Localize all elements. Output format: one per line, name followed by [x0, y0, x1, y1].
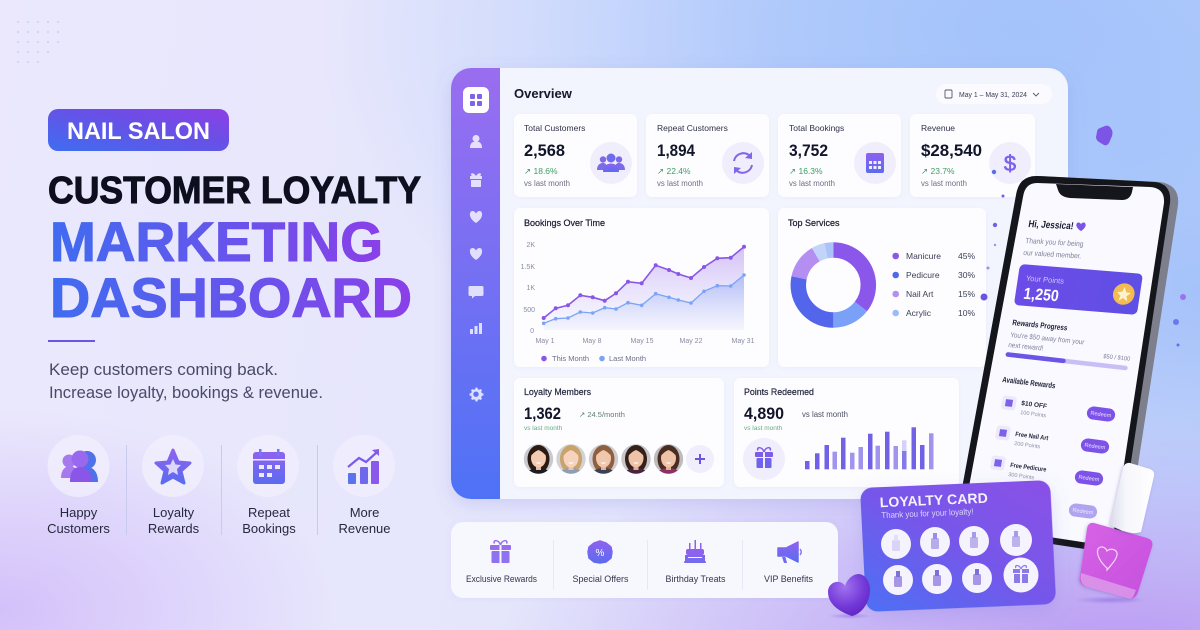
- benefit: birthday treats: Birthday Treats: [666, 574, 726, 585]
- stat card: revenue: ↗ 23.7%: [921, 166, 955, 176]
- reward: 10 off: [1001, 395, 1116, 422]
- donut legend: Manicure: [906, 251, 941, 261]
- benefit: loyalty rewards: Rewards: [148, 521, 200, 536]
- benefit: special offers: Special Offers: [572, 574, 629, 585]
- card subtitle: Thank you for your loyalty!: [881, 506, 974, 520]
- donut legend: Pedicure: [906, 270, 940, 280]
- stat card: repeat customers: ↗ 22.4%: [657, 166, 691, 176]
- benefit: exclusive rewards: Exclusive Rewards: [466, 574, 537, 585]
- donut legend: 15%: [958, 289, 975, 299]
- benefit: more revenue: More: [350, 505, 379, 520]
- bottom benefits strip: [451, 522, 838, 598]
- polish cap: [1110, 463, 1154, 533]
- donut legend: Acrylic: [906, 308, 932, 318]
- y axis labels: 1K: [526, 285, 535, 292]
- member avatar 2: [556, 444, 586, 474]
- stat card: total bookings: ↗ 16.3%: [789, 166, 823, 176]
- area: this month: [544, 247, 744, 330]
- y axis labels: 0: [530, 328, 534, 335]
- x axis labels: May 8: [582, 338, 602, 345]
- chart card: top services: [778, 208, 986, 367]
- title: MARKETING: [50, 210, 383, 273]
- stat card: repeat customers: vs last month: [657, 179, 703, 188]
- badge: nail salon: [48, 109, 229, 151]
- sidebar: [451, 68, 500, 499]
- decorative dot grid: [17, 21, 59, 63]
- stat card: repeat customers: Repeat Customers: [657, 123, 728, 133]
- card stamps: [881, 524, 1038, 595]
- benefit: more revenue: Revenue: [338, 521, 391, 536]
- benefit: repeat bookings: Repeat: [248, 505, 290, 520]
- benefit: loyalty rewards: Loyalty: [153, 505, 195, 520]
- stat card: total customers: vs last month: [524, 179, 570, 188]
- stat card: total bookings: 3,752: [789, 141, 828, 160]
- x axis labels: May 22: [680, 338, 703, 345]
- chart legend: This Month: [552, 354, 589, 363]
- rewards progress: You're $50 away from your: [1010, 332, 1085, 346]
- x axis labels: May 1: [535, 338, 555, 345]
- stat card: repeat customers: 1,894: [657, 141, 695, 160]
- icon: gift: [743, 438, 785, 480]
- card: loyalty members: 1,362: [524, 405, 561, 423]
- member avatar 1: [524, 444, 554, 474]
- donut legend: Nail Art: [906, 289, 934, 299]
- card: loyalty members: vs last month: [524, 425, 563, 432]
- stat card: total customers: 2,568: [524, 141, 565, 160]
- line: this month: [544, 247, 744, 318]
- stat card: total bookings: Total Bookings: [789, 123, 844, 133]
- 3d heart: [828, 574, 872, 619]
- reward: 10 off: Redeem: [1090, 411, 1112, 419]
- icon: dashboard active: [463, 87, 489, 113]
- bar chart: [805, 427, 934, 469]
- donut legend: [892, 251, 975, 318]
- reward: free pedicure: Free Pedicure: [1010, 462, 1047, 474]
- stat card: revenue: vs last month: [921, 179, 967, 188]
- area: last month: [544, 275, 744, 330]
- reward: free pedicure: [990, 455, 1104, 486]
- line: last month: [544, 275, 744, 323]
- card: points redeemed: vs last month: [802, 410, 848, 419]
- chart card: bookings over time: [514, 208, 769, 367]
- member avatar 4: [621, 444, 651, 474]
- rewards progress: Rewards Progress: [1012, 318, 1069, 333]
- reward: free pedicure: 300 Points: [1008, 472, 1035, 481]
- benefit: happy customers: Customers: [47, 521, 110, 536]
- date picker: [936, 84, 1052, 104]
- stat card: total customers: [514, 114, 637, 197]
- chart card: top services: Top Services: [788, 218, 840, 228]
- card: points redeemed: Points Redeemed: [744, 387, 814, 397]
- chart legend: Last Month: [609, 354, 646, 363]
- phone screen: [965, 183, 1164, 544]
- reward: free nail art: Redeem: [1084, 443, 1106, 451]
- card: points redeemed: [734, 378, 959, 487]
- card: loyalty members: ↗ 24.5/month: [579, 410, 625, 419]
- phone: [957, 176, 1178, 551]
- reward: free nail art: 200 Points: [1014, 441, 1041, 450]
- reward: faded redeem button: Redeem: [1072, 508, 1094, 516]
- donut legend: 45%: [958, 251, 975, 261]
- rewards progress: $50 / $100: [1103, 354, 1131, 363]
- chart card: bookings over time: Bookings Over Time: [524, 218, 605, 228]
- title: CUSTOMER LOYALTY: [48, 170, 421, 212]
- donut legend: 10%: [958, 308, 975, 318]
- subtitle: [49, 360, 323, 402]
- member avatar 5: [654, 444, 684, 474]
- stat card: total customers: ↗ 18.6%: [524, 166, 558, 176]
- x axis labels: May 31: [732, 338, 755, 345]
- polish body: [1080, 523, 1152, 598]
- benefit: vip benefits: [764, 542, 813, 585]
- points card: 1,250: [1022, 285, 1060, 305]
- y axis labels: 2K: [526, 242, 535, 249]
- benefit: special offers: [572, 541, 629, 585]
- card heading: LOYALTY CARD: [879, 490, 988, 510]
- x axis labels: [535, 338, 755, 345]
- title: DASHBOARD: [50, 266, 412, 329]
- points card: Your Points: [1025, 274, 1065, 286]
- benefit: birthday treats: [666, 540, 726, 585]
- card: loyalty members: [514, 378, 724, 487]
- benefit: happy customers: Happy: [60, 505, 98, 520]
- reward: free pedicure: Redeem: [1078, 475, 1100, 483]
- stat card: total bookings: [778, 114, 901, 197]
- loyalty card: [860, 480, 1056, 612]
- chart legend: [541, 354, 646, 363]
- confetti: [980, 126, 1186, 347]
- greeting: Hi, Jessica!: [1027, 219, 1074, 232]
- add member button: [686, 445, 714, 473]
- benefit: happy customers: [47, 435, 110, 536]
- greeting: our valued member.: [1023, 248, 1082, 260]
- benefit: repeat bookings: Bookings: [242, 521, 296, 536]
- rewards progress: next reward!: [1008, 342, 1044, 352]
- phone notch: [1056, 184, 1133, 200]
- stat card: revenue: $28,540: [921, 141, 982, 160]
- card: points redeemed: vs last month: [744, 425, 783, 432]
- reward: free nail art: [995, 425, 1110, 454]
- benefit: more revenue: [333, 435, 395, 536]
- y axis labels: 1.5K: [521, 264, 535, 271]
- y axis labels: [521, 242, 535, 335]
- benefit: loyalty rewards: [142, 435, 204, 536]
- stat card: revenue: $: [1004, 151, 1016, 176]
- x axis labels: May 15: [631, 338, 654, 345]
- stat card: revenue: Revenue: [921, 123, 955, 133]
- title: [48, 170, 421, 329]
- greeting: Thank you for being: [1025, 236, 1084, 248]
- stat card: total customers: Total Customers: [524, 123, 585, 133]
- reward: 10 off: 100 Points: [1020, 410, 1047, 419]
- sidebar icons: [468, 135, 484, 402]
- card: points redeemed: 4,890: [744, 405, 784, 423]
- y axis labels: 500: [523, 307, 535, 314]
- available rewards: [990, 375, 1116, 519]
- nail polish bottle: [1074, 463, 1154, 604]
- reward: free nail art: Free Nail Art: [1015, 431, 1050, 442]
- badge: nail salon: NAIL SALON: [67, 118, 210, 145]
- points card: [1014, 264, 1143, 315]
- subtitle: Keep customers coming back.: [49, 360, 278, 379]
- benefit: vip benefits: VIP Benefits: [764, 574, 813, 585]
- stat card: repeat customers: [646, 114, 769, 197]
- benefit: repeat bookings: [237, 435, 299, 536]
- donut chart: [798, 250, 868, 320]
- overview heading: Overview: [514, 86, 573, 101]
- stat card: total bookings: vs last month: [789, 179, 835, 188]
- rewards progress: [1005, 318, 1131, 371]
- benefit: exclusive rewards: [466, 541, 537, 585]
- reward: 10 off: $10 OFF: [1021, 400, 1047, 410]
- donut legend: 30%: [958, 270, 975, 280]
- stat card: revenue: [910, 114, 1035, 197]
- available rewards: Available Rewards: [1002, 375, 1057, 390]
- reward: faded redeem button: [1068, 503, 1098, 519]
- dashboard panel: [451, 68, 1068, 499]
- date picker: May 1 – May 31, 2024: [959, 90, 1027, 99]
- benefit icon row: [47, 435, 395, 536]
- member avatar 3: [588, 444, 618, 474]
- subtitle: Increase loyalty, bookings & revenue.: [49, 383, 323, 402]
- card: loyalty members: Loyalty Members: [524, 387, 592, 397]
- greeting: [1023, 219, 1086, 260]
- polish heart: [1097, 547, 1117, 570]
- benefit: special offers: %: [596, 548, 605, 559]
